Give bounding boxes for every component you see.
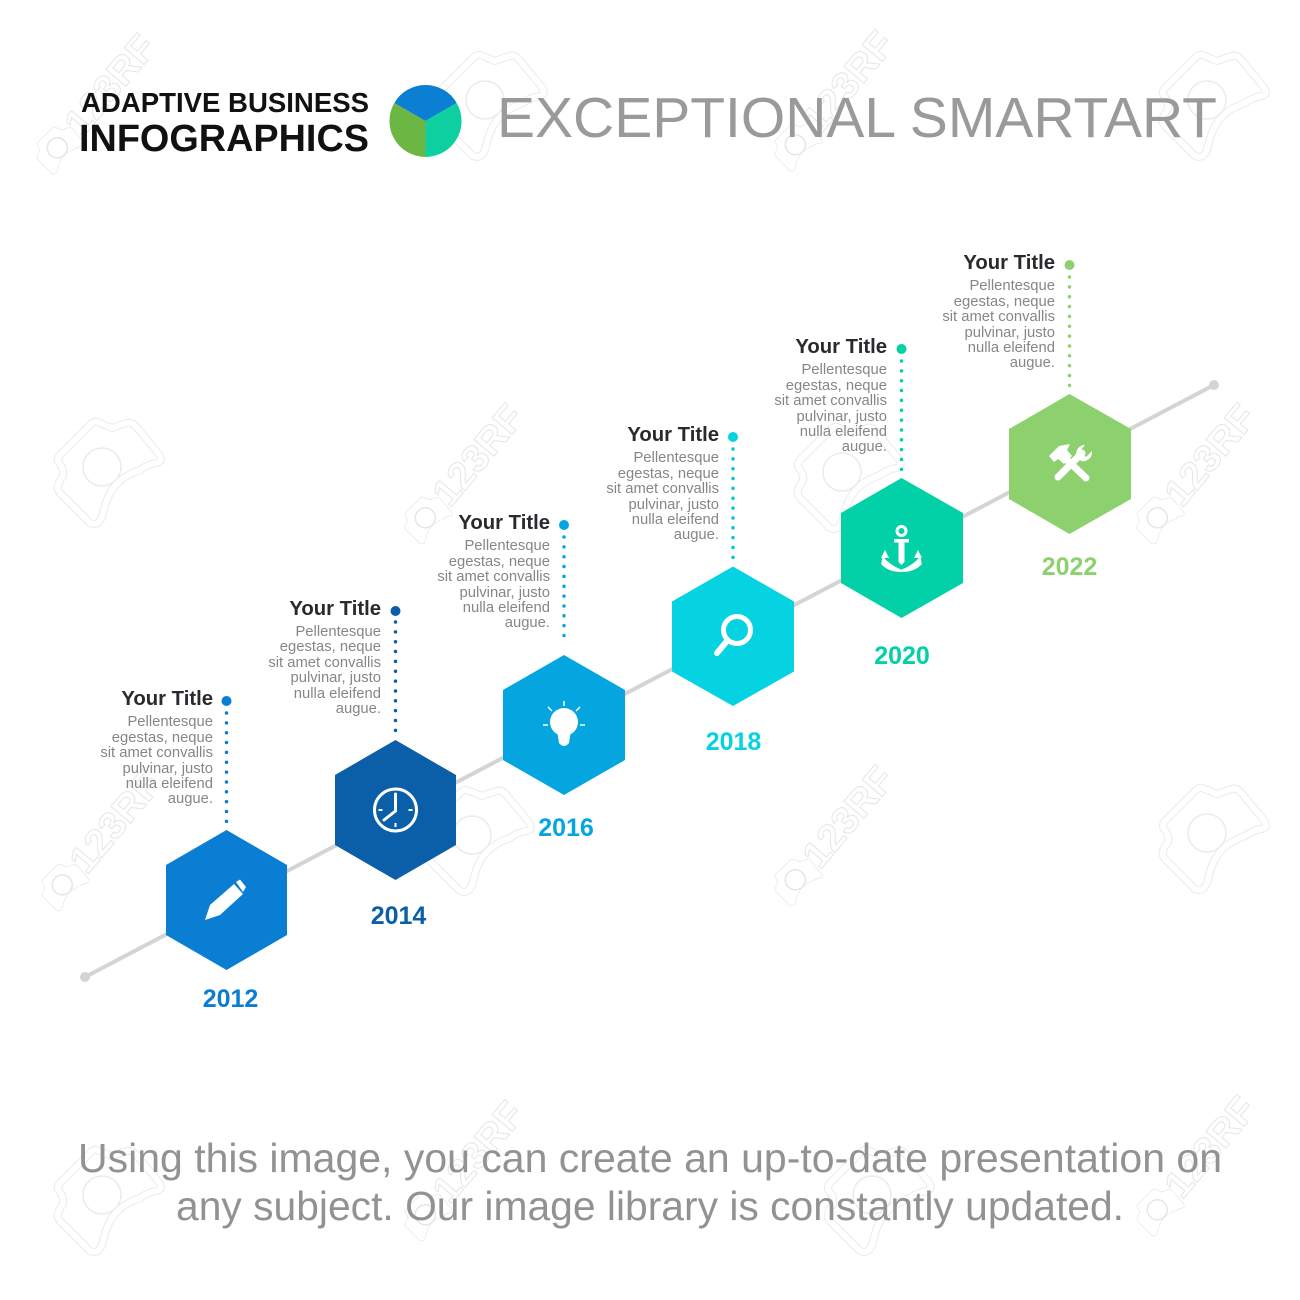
text block 2016: egestas, neque	[449, 554, 550, 570]
text block 2022: augue.	[1010, 355, 1055, 371]
connector 2016	[559, 520, 569, 645]
header logo text	[79, 87, 369, 160]
step 2012	[100, 688, 287, 1013]
text block 2014: pulvinar, justo	[291, 670, 381, 686]
text block 2022: pulvinar, justo	[965, 325, 1055, 341]
text block 2016: sit amet convallis	[437, 569, 550, 585]
text block 2012: Your Title	[121, 688, 213, 710]
text block 2020: sit amet convallis	[774, 393, 887, 409]
year 2012: 2012	[203, 985, 258, 1013]
text block 2018: nulla eleifend	[632, 512, 719, 528]
text block 2018: pulvinar, justo	[629, 497, 719, 513]
text block 2012: nulla eleifend	[126, 776, 213, 792]
text block 2016: Your Title	[458, 512, 550, 534]
hexagon 2016	[503, 655, 625, 795]
text block 2020: augue.	[842, 439, 887, 455]
connector 2012	[222, 696, 232, 823]
text block 2018: Your Title	[627, 424, 719, 446]
text block 2016: pulvinar, justo	[460, 585, 550, 601]
watermark pattern: 123RF	[425, 397, 533, 514]
watermark pattern: 123RF	[795, 24, 903, 141]
footer caption: Using this image, you can create an up-to-date presentation on	[78, 1135, 1222, 1181]
year 2014: 2014	[371, 902, 426, 930]
watermark pattern: 123RF	[62, 764, 170, 881]
text block 2018: Pellentesque	[633, 450, 719, 466]
icon: hammer and wrench	[1049, 444, 1092, 478]
year 2020: 2020	[874, 642, 930, 670]
logo pie icon	[389, 85, 462, 157]
text block 2012: sit amet convallis	[100, 745, 213, 761]
text block 2014: sit amet convallis	[268, 655, 381, 671]
header logo text: INFOGRAPHICS	[79, 118, 369, 160]
year 2018: 2018	[706, 728, 761, 756]
hexagon 2018	[672, 566, 794, 706]
text block 2020: Pellentesque	[801, 362, 887, 378]
hexagon 2012	[166, 830, 287, 970]
icon: anchor	[881, 526, 922, 571]
hexagon 2014	[335, 740, 456, 880]
text block 2020: pulvinar, justo	[797, 409, 887, 425]
text block 2014: Your Title	[289, 598, 381, 620]
text block 2012: egestas, neque	[112, 730, 213, 746]
text block 2014: nulla eleifend	[294, 686, 381, 702]
timeline line	[80, 380, 1219, 982]
text block 2012: pulvinar, justo	[123, 761, 213, 777]
text block 2014	[268, 598, 381, 717]
text block 2018	[606, 424, 719, 543]
text block 2022: egestas, neque	[954, 294, 1055, 310]
connector 2018	[728, 432, 738, 558]
text block 2016: augue.	[505, 615, 550, 631]
step 2016	[437, 512, 625, 842]
connector 2020	[896, 344, 906, 470]
text block 2022: sit amet convallis	[942, 309, 1055, 325]
text block 2020	[774, 336, 887, 455]
watermark pattern: 123RF	[795, 759, 903, 876]
hexagon 2020	[841, 478, 963, 618]
text block 2016	[437, 512, 550, 631]
hexagon 2022	[1009, 394, 1131, 534]
text block 2014: augue.	[336, 701, 381, 717]
footer caption: any subject. Our image library is constantly updated.	[176, 1183, 1124, 1229]
watermark pattern: 123RF	[57, 27, 165, 144]
text block 2020: nulla eleifend	[800, 424, 887, 440]
text block 2018: egestas, neque	[618, 466, 719, 482]
text block 2016: nulla eleifend	[463, 600, 550, 616]
main title: EXCEPTIONAL SMARTART	[497, 86, 1217, 150]
step 2022	[942, 252, 1131, 581]
text block 2020: Your Title	[795, 336, 887, 358]
step 2014	[268, 598, 456, 930]
text block 2018: sit amet convallis	[606, 481, 719, 497]
text block 2012: augue.	[168, 791, 213, 807]
text block 2022: Pellentesque	[969, 278, 1055, 294]
icon: light bulb	[543, 701, 585, 746]
connector 2022	[1064, 260, 1074, 386]
icon: magnifier	[717, 616, 750, 653]
text block 2018: augue.	[674, 527, 719, 543]
footer caption	[78, 1135, 1222, 1229]
year 2016: 2016	[538, 814, 594, 842]
watermark pattern: 123RF	[1157, 397, 1265, 514]
text block 2014: egestas, neque	[280, 639, 381, 655]
text block 2014: Pellentesque	[295, 624, 381, 640]
step 2020	[774, 336, 963, 670]
text block 2012: Pellentesque	[127, 714, 213, 730]
icon: pencil	[205, 880, 246, 920]
year 2022: 2022	[1042, 553, 1097, 581]
watermark pattern: 123RF	[1157, 1089, 1265, 1206]
watermark pattern: 123RF	[425, 1094, 533, 1211]
text block 2022: Your Title	[963, 252, 1055, 274]
text block 2020: egestas, neque	[786, 378, 887, 394]
connector 2014	[390, 606, 400, 733]
text block 2012	[100, 688, 213, 807]
text block 2022: nulla eleifend	[968, 340, 1055, 356]
text block 2022	[942, 252, 1055, 371]
step 2018	[606, 424, 794, 756]
icon: clock	[374, 789, 416, 831]
header logo text: ADAPTIVE BUSINESS	[81, 87, 369, 118]
text block 2016: Pellentesque	[464, 538, 550, 554]
